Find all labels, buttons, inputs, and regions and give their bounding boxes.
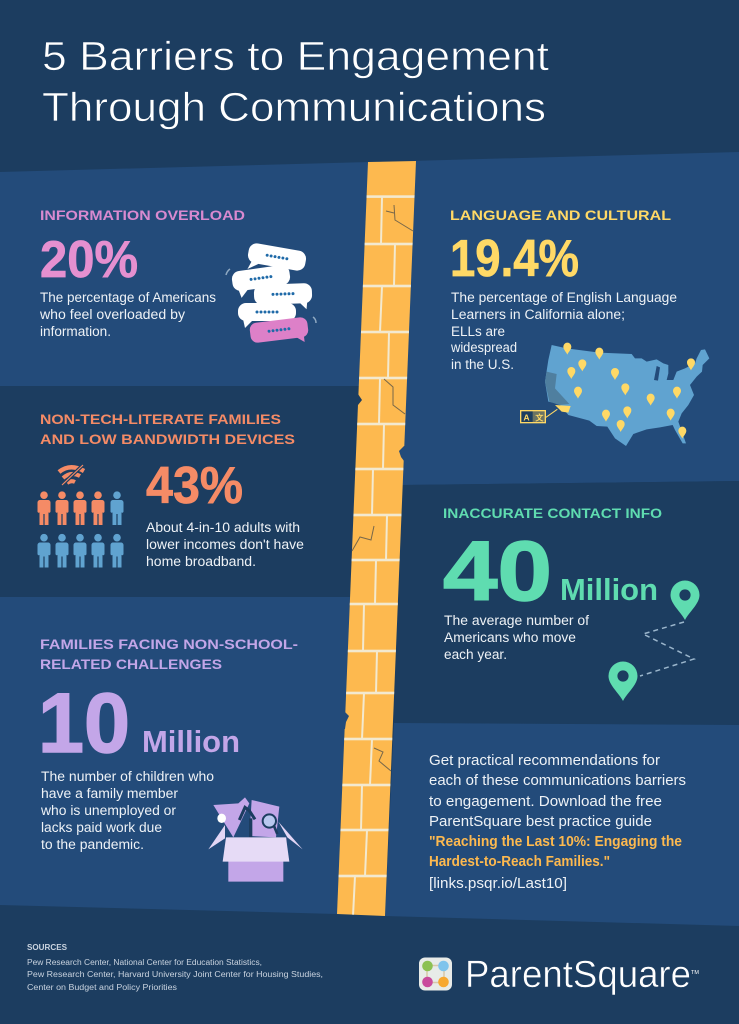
- text: information overload description: [39, 290, 216, 339]
- text: information overload description: who feel overloaded by: [39, 307, 185, 322]
- text: language description: Learners in California alone;: [451, 307, 625, 322]
- pictogram: people: [37, 491, 124, 568]
- panel: families facing challenges: [0, 597, 350, 914]
- heading: language and cultural: LANGUAGE AND CULTURAL: [450, 207, 672, 223]
- text: broadband description: home broadband.: [146, 554, 256, 569]
- sources: SOURCES: [27, 943, 68, 952]
- map: United States: 文: [535, 412, 544, 422]
- stat: 40 million: Million: [560, 572, 658, 607]
- text: language description: in the U.S.: [451, 357, 514, 372]
- call to action text: [links.psqr.io/Last10]: [429, 876, 567, 892]
- text: information overload description: information.: [40, 324, 111, 339]
- information overload section: [39, 207, 316, 348]
- icon: chat bubbles: [226, 242, 316, 348]
- heading: non-tech-literate families: AND LOW BANDWIDTH DEVICES: [40, 431, 295, 447]
- call to action text: each of these communications barriers: [429, 773, 686, 789]
- text: broadband description: About 4-in-10 adults with: [146, 520, 300, 535]
- text: children description: to the pandemic.: [41, 837, 144, 852]
- sources: Pew Research Center, National Center for Education Statistics,: [27, 958, 262, 967]
- sources: Center on Budget and Policy Priorities: [27, 983, 177, 992]
- call to action text: ParentSquare best practice guide: [429, 814, 652, 830]
- text: children description: The number of children who: [41, 769, 214, 784]
- call to action text: to engagement. Download the free: [429, 794, 662, 810]
- heading: non-tech-literate families: NON-TECH-LITERATE FAMILIES: [40, 411, 281, 427]
- heading: non-tech-literate families: [40, 411, 295, 447]
- sources: [27, 943, 323, 992]
- heading: information overload: INFORMATION OVERLOAD: [40, 207, 245, 223]
- icon: wifi crossed out: [59, 464, 84, 486]
- text: broadband description: [146, 520, 304, 569]
- text: language description: The percentage of English Language: [451, 290, 677, 305]
- text: children description: lacks paid work due: [41, 820, 162, 835]
- stat: 43%: 43%: [146, 457, 243, 515]
- icon: open box of items: [208, 797, 303, 882]
- text: information overload description: The percentage of Americans: [40, 290, 216, 305]
- panel: information overload: [0, 162, 370, 386]
- heading: families facing challenges: RELATED CHALLENGES: [40, 656, 222, 672]
- heading: inaccurate contact info: INACCURATE CONTACT INFO: [443, 505, 662, 521]
- stat: 10 million: [38, 676, 240, 770]
- heading: families facing challenges: FAMILIES FACING NON-SCHOOL-: [40, 636, 298, 652]
- panel: non-tech-literate families: [0, 386, 360, 597]
- inaccurate contact info section: [443, 505, 700, 701]
- text: movers description: The average number of: [444, 613, 589, 628]
- text: children description: who is unemployed or: [40, 803, 177, 818]
- map: United States: [521, 343, 709, 446]
- call to action text: Hardest-to-Reach Families.": [429, 854, 610, 870]
- text: movers description: Americans who move: [444, 630, 576, 645]
- text: broadband description: lower incomes don't have: [146, 537, 304, 552]
- brick wall: [337, 161, 416, 916]
- text: language description: [450, 290, 677, 372]
- stat: 40 million: 40: [443, 524, 552, 618]
- icon: route with location pins: [608, 580, 700, 701]
- stat: 40 million: [443, 524, 658, 618]
- language and cultural section: [450, 207, 709, 446]
- stat: 10 million: 10: [38, 676, 130, 770]
- families facing challenges section: [38, 636, 303, 882]
- icon: ParentSquare mark: [419, 958, 452, 990]
- text: movers description: [444, 613, 589, 662]
- sources: Pew Research Center, Harvard University Joint Center for Housing Studies,: [27, 970, 323, 979]
- title: Through Communications: [42, 84, 546, 130]
- map: United States: A: [523, 412, 530, 422]
- text: children description: [40, 769, 214, 852]
- heading: families facing challenges: [40, 636, 298, 672]
- call to action text: Get practical recommendations for: [429, 753, 660, 769]
- panel: language and cultural: [402, 152, 739, 485]
- text: movers description: each year.: [444, 647, 507, 662]
- call to action text: "Reaching the Last 10%: Engaging the: [429, 834, 682, 850]
- title: [42, 33, 550, 130]
- non-tech-literate section: [37, 411, 304, 569]
- stat: 19.4%: 19.4%: [450, 230, 579, 288]
- logo: ParentSquare: TM: [691, 970, 699, 976]
- stat: 10 million: Million: [142, 724, 240, 759]
- text: children description: have a family member: [41, 786, 179, 801]
- text: language description: ELLs are: [451, 324, 505, 339]
- logo: ParentSquare: ParentSquare: [465, 954, 691, 996]
- panel: inaccurate contact info: [394, 481, 739, 725]
- text: language description: widespread: [450, 340, 517, 355]
- call to action text: [429, 753, 686, 892]
- stat: 20%: 20%: [40, 231, 138, 289]
- title: 5 Barriers to Engagement: [42, 33, 550, 79]
- panel: call to action: [385, 723, 739, 926]
